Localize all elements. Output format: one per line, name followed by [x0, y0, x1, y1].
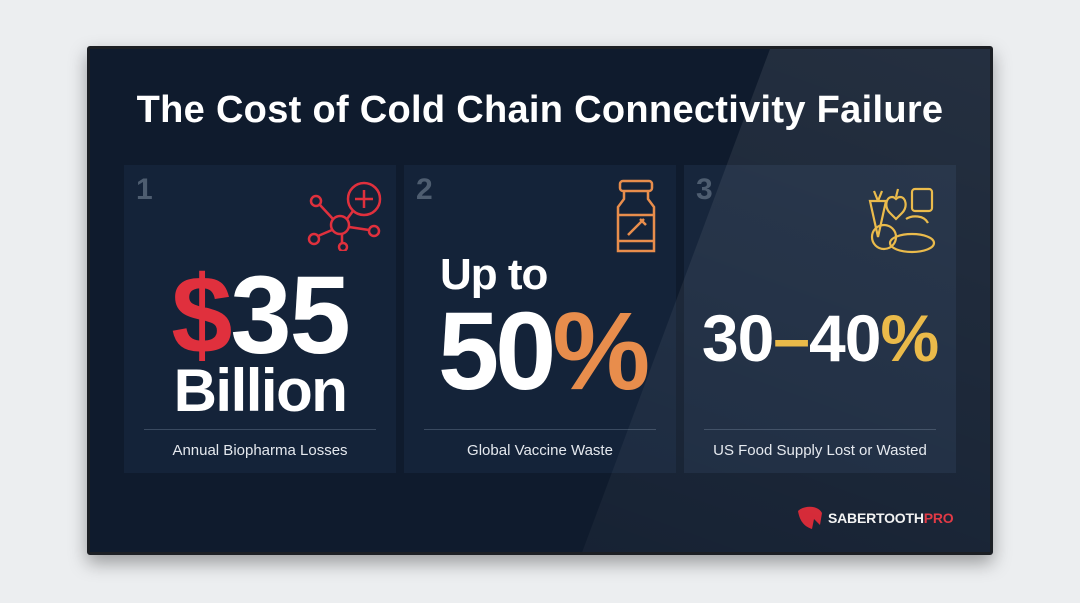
stat Up to 50%: Up to [440, 250, 547, 299]
panel: food [684, 165, 956, 473]
panel: vaccine [404, 165, 676, 473]
panel: vaccine: 50% [438, 290, 646, 413]
label: Annual Biopharma Losses [172, 442, 348, 459]
panel: biopharma [124, 165, 396, 473]
title: The Cost of Cold Chain Connectivity Failure [137, 89, 943, 131]
icon: food [868, 188, 936, 254]
icon: molecule [308, 182, 382, 251]
label: Global Vaccine Waste [467, 442, 613, 459]
tv screen [87, 46, 993, 555]
number 3: 3 [696, 173, 713, 206]
stat 30-40%: 30–40% [702, 301, 938, 375]
label: US Food Supply Lost or Wasted [713, 442, 927, 459]
number 2: 2 [416, 173, 433, 206]
icon: vaccine bottle [616, 180, 656, 252]
logo: SABERTOOTHPRO [828, 510, 954, 526]
number 1: 1 [136, 173, 153, 206]
stat $35 Billion: $35 [171, 254, 349, 377]
panel: biopharma: Billion [174, 357, 346, 424]
icon: sabertooth [798, 506, 822, 529]
logo [798, 506, 954, 529]
